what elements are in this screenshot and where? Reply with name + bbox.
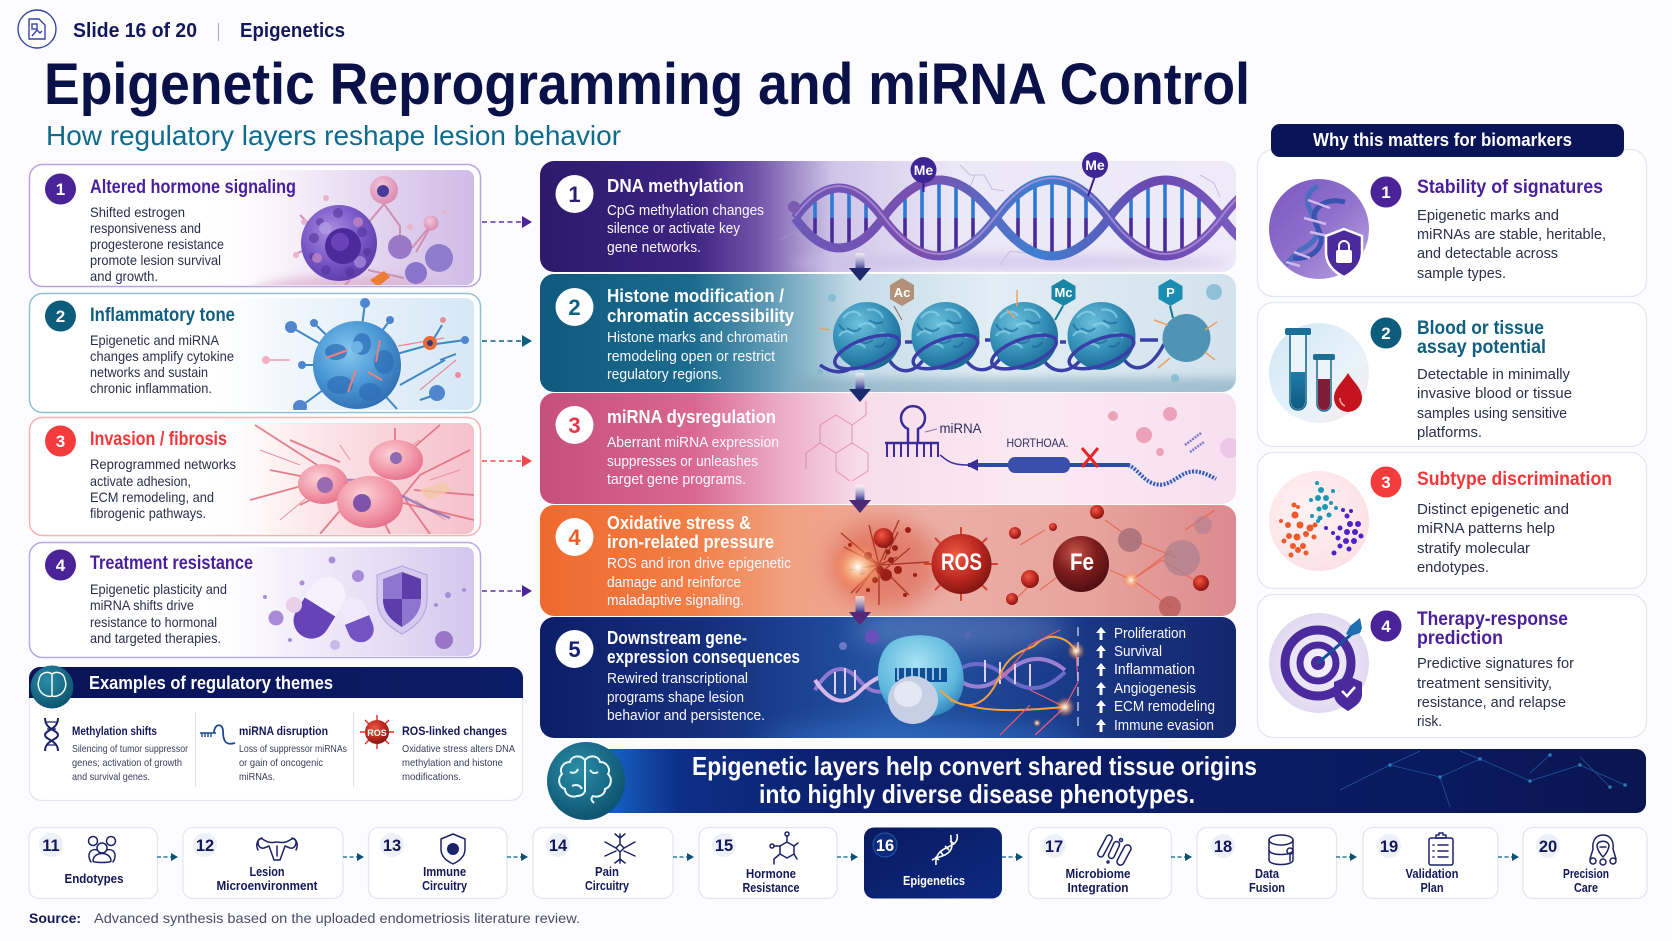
banner text <box>692 751 1257 809</box>
banner text: Epigenetic layers help convert shared tissue origins <box>692 751 1257 781</box>
number badge <box>556 288 594 326</box>
heading <box>607 627 800 667</box>
step 12: Lesion Microenvironment: 12 <box>196 837 214 855</box>
description: miRNA shifts drive <box>90 598 194 613</box>
step 17: Microbiome Integration: Microbiome <box>1066 867 1131 881</box>
description: samples using sensitive <box>1417 405 1567 422</box>
description: ROS and iron drive epigenetic <box>607 556 791 572</box>
step 14: Pain Circuitry <box>533 828 673 898</box>
heading: Blood or tissue <box>1417 317 1544 339</box>
description: responsiveness and <box>90 221 201 236</box>
header bar <box>29 667 523 698</box>
description: Aberrant miRNA expression <box>607 435 779 451</box>
step 15: Hormone Resistance <box>699 828 837 898</box>
description: chronic inflammation. <box>90 381 212 396</box>
section name: Epigenetics <box>240 20 345 42</box>
description <box>1417 207 1606 282</box>
description: Distinct epigenetic and <box>1417 501 1569 518</box>
panel heading: why this matters <box>1271 124 1624 157</box>
biomarker card 2: assay potential <box>1258 302 1646 446</box>
description: miRNAs are stable, heritable, <box>1417 226 1606 243</box>
step 16: Epigenetics (current) <box>864 828 1002 898</box>
theme: ROS-linked changes <box>360 715 515 783</box>
description: ECM remodeling, and <box>90 490 214 505</box>
description <box>1417 501 1569 576</box>
icon: target and arrow <box>1269 613 1369 713</box>
description: networks and sustain <box>90 365 208 380</box>
description: stratify molecular <box>1417 540 1530 557</box>
heading: assay potential <box>1417 336 1546 358</box>
step 13: Immune Circuitry: 13 <box>383 837 401 855</box>
illustration: DNA helix <box>780 164 1236 272</box>
description <box>90 205 224 284</box>
description: platforms. <box>1417 424 1482 441</box>
panel: altered hormone signaling <box>28 164 482 288</box>
heading <box>1417 608 1568 649</box>
layer 4: oxidative stress <box>540 505 1236 618</box>
description <box>607 556 791 609</box>
description <box>607 671 765 724</box>
number badge: 1 <box>568 182 581 207</box>
number badge: 4 <box>1381 617 1391 636</box>
target transcript <box>940 455 1216 485</box>
biomarker card 3: subtype discrimination <box>1258 452 1646 588</box>
subtitle: How regulatory layers reshape lesion behavior <box>46 120 621 151</box>
methyl tag <box>910 157 936 192</box>
list: upregulated outcomes: ECM remodeling <box>1114 699 1215 715</box>
heading: Inflammatory tone <box>90 305 235 326</box>
step 17: Microbiome Integration: Integration <box>1068 881 1128 895</box>
histone mark: P <box>1158 279 1182 318</box>
miRNA hairpin <box>885 406 939 457</box>
step 20: Precision Care: Care <box>1574 881 1598 895</box>
description: Predictive signatures for <box>1417 655 1574 672</box>
step 16: Epigenetics (current): Epigenetics <box>903 874 965 888</box>
icon: ROS burst: ROS <box>367 728 387 738</box>
step 12: Lesion Microenvironment: Lesion <box>250 865 284 879</box>
illustration: inflamed cell <box>262 298 474 410</box>
histone mark: Mc: Mc <box>1054 285 1073 300</box>
description: maladaptive signaling. <box>607 593 744 609</box>
step 13: Immune Circuitry: Circuitry <box>422 879 467 893</box>
step 16: Epigenetics (current): 16 <box>876 837 894 855</box>
description: Epigenetic plasticity and <box>90 582 227 597</box>
description <box>607 203 764 256</box>
heading <box>607 285 795 326</box>
step 17: Microbiome Integration: 17 <box>1045 838 1063 856</box>
description: treatment sensitivity, <box>1417 675 1552 692</box>
theme: methylation shifts: Silencing of tumor suppressor <box>72 743 188 755</box>
number badge <box>1370 610 1402 642</box>
illustration: miRNA hairpin and target <box>806 401 1240 485</box>
step 15: Hormone Resistance: 15 <box>715 837 733 855</box>
step 19: Validation Plan <box>1363 828 1498 898</box>
step 19: Validation Plan: Plan <box>1420 881 1444 895</box>
description: Shifted estrogen <box>90 205 185 220</box>
arrow: card 1 to layer 1 <box>482 216 532 228</box>
number badge <box>45 426 76 456</box>
description: miRNA patterns help <box>1417 520 1555 537</box>
description <box>90 457 236 521</box>
description: changes amplify cytokine <box>90 349 234 364</box>
description: damage and reinforce <box>607 575 741 591</box>
layer 1: DNA methylation <box>540 152 1236 272</box>
step 18: Data Fusion <box>1197 828 1336 898</box>
description: silence or activate key <box>607 221 741 237</box>
heading: Subtype discrimination <box>1417 468 1612 490</box>
step 13: Immune Circuitry <box>368 828 507 898</box>
panel heading: why this matters: Why this matters for biomarkers <box>1313 130 1572 150</box>
list: upregulated outcomes: Survival <box>1114 644 1162 660</box>
icon: brain badge <box>30 666 74 708</box>
step 13: Immune Circuitry: Immune <box>423 865 466 879</box>
number badge: 3 <box>568 413 581 438</box>
panel: inflammatory tone <box>30 294 480 414</box>
description: sample types. <box>1417 265 1506 282</box>
banner text: into highly diverse disease phenotypes. <box>759 779 1195 809</box>
number badge <box>556 518 594 556</box>
illustration: ROS and iron <box>830 505 1215 618</box>
title: Epigenetic Reprogramming and miRNA Control <box>44 52 1250 117</box>
description: and targeted therapies. <box>90 631 221 646</box>
description <box>90 582 227 646</box>
step 18: Data Fusion: Data <box>1255 867 1280 881</box>
heading: Therapy-response <box>1417 608 1568 630</box>
step 19: Validation Plan: 19 <box>1380 838 1398 856</box>
illustration: miRNA hairpin and target: miRNA <box>940 420 982 436</box>
number badge <box>45 300 76 332</box>
icon: brain <box>547 742 625 820</box>
number badge: 1 <box>1381 183 1391 202</box>
theme: ROS-linked changes: Oxidative stress alters DNA <box>402 743 515 755</box>
description: behavior and persistence. <box>607 708 765 724</box>
network decoration <box>1340 751 1627 807</box>
heading: miRNA dysregulation <box>607 406 776 427</box>
number badge <box>556 175 594 213</box>
layer 2: histone modification <box>540 274 1240 400</box>
heading: chromatin accessibility <box>607 305 795 326</box>
histone mark: P: P <box>1166 285 1175 300</box>
number badge: 4 <box>56 556 66 575</box>
theme: miRNA disruption: miRNAs. <box>239 771 275 783</box>
number badge: 2 <box>1381 324 1391 343</box>
number badge: 4 <box>568 525 581 550</box>
illustration: fibrotic cells <box>250 423 474 534</box>
number badge: 3 <box>1381 473 1391 492</box>
number badge: 2 <box>56 307 65 326</box>
step 12: Lesion Microenvironment: Microenvironment <box>216 879 318 893</box>
step 18: Data Fusion: Fusion <box>1249 881 1285 895</box>
description: Histone marks and chromatin <box>607 330 788 346</box>
description <box>607 435 779 488</box>
heading: prediction <box>1417 627 1503 649</box>
theme: ROS-linked changes: modifications. <box>402 771 461 783</box>
heading <box>607 512 774 552</box>
theme: methylation shifts: genes; activation of growth <box>72 757 182 769</box>
source line: Source: <box>29 910 81 926</box>
number badge: 3 <box>56 432 65 451</box>
theme: miRNA disruption: miRNA disruption <box>239 726 328 738</box>
heading: Altered hormone signaling <box>90 177 296 198</box>
icon: DNA with shield <box>1269 179 1369 279</box>
theme: methylation shifts: and survival genes. <box>72 771 150 783</box>
illustration: miRNA hairpin and target: HORTHOAA. <box>1006 436 1068 450</box>
layer 3: miRNA dysregulation <box>540 393 1240 504</box>
heading: DNA methylation <box>607 175 744 196</box>
step 14: Pain Circuitry: Circuitry <box>585 879 629 893</box>
step 20: Precision Care <box>1523 828 1647 898</box>
list: upregulated outcomes <box>1096 626 1215 734</box>
description <box>1417 655 1574 730</box>
theme: methylation shifts: Methylation shifts <box>72 726 157 738</box>
panel: examples of regulatory themes <box>29 666 523 800</box>
icon: DNA <box>45 718 58 751</box>
number badge <box>556 406 594 444</box>
header bar: Examples of regulatory themes <box>89 672 333 693</box>
description: invasive blood or tissue <box>1417 385 1572 402</box>
histone mark: Mc <box>1052 279 1076 320</box>
panel: treatment resistance <box>30 542 480 658</box>
biomarker card 4: therapy response <box>1258 594 1646 738</box>
description: risk. <box>1417 713 1442 730</box>
illustration: capsules and shield <box>262 547 474 656</box>
description: resistance, and relapse <box>1417 694 1566 711</box>
icon: ROS burst <box>360 715 394 749</box>
histone mark: Ac: Ac <box>894 285 910 300</box>
illustration: ROS and iron: Fe <box>1070 549 1094 576</box>
step 11: Endotypes <box>29 828 158 898</box>
description: endotypes. <box>1417 559 1489 576</box>
illustration: ROS and iron: ROS <box>941 549 982 576</box>
methyl tag: Me <box>1085 157 1105 173</box>
heading: Treatment resistance <box>90 553 253 574</box>
description <box>90 333 234 396</box>
theme: miRNA disruption: Loss of suppressor miRNAs <box>239 743 347 755</box>
icon: tubes and blood drop <box>1269 323 1369 423</box>
step 18: Data Fusion: 18 <box>1214 838 1232 856</box>
description: and detectable across <box>1417 245 1558 262</box>
theme: miRNA disruption <box>200 725 347 783</box>
heading: Stability of signatures <box>1417 176 1603 198</box>
heading: Downstream gene- <box>607 627 747 648</box>
connector arrows between steps <box>157 853 1519 861</box>
list: upregulated outcomes: Inflammation <box>1114 662 1195 678</box>
navigation strip <box>29 828 1647 898</box>
step 19: Validation Plan: Validation <box>1406 867 1458 881</box>
step 15: Hormone Resistance: Resistance <box>742 881 800 895</box>
heading <box>1417 317 1546 358</box>
histone mark: Ac <box>890 278 914 320</box>
description: Reprogrammed networks <box>90 457 236 472</box>
biomarker card 1: stability <box>1258 150 1646 296</box>
description: remodeling open or restrict <box>607 349 775 365</box>
number badge <box>45 550 76 580</box>
arrow: card 4 to layer 4 <box>482 585 532 597</box>
panel: invasion / fibrosis <box>30 418 480 536</box>
heading: Oxidative stress & <box>607 512 751 533</box>
takeaway banner <box>547 742 1646 820</box>
theme: methylation shifts <box>45 718 188 783</box>
layer 5: downstream consequences <box>540 617 1236 738</box>
arrow: layer 1 to 2 <box>849 253 871 281</box>
theme: miRNA disruption: or gain of oncogenic <box>239 757 323 769</box>
heading: iron-related pressure <box>607 531 774 552</box>
list: upregulated outcomes: Immune evasion <box>1114 718 1214 734</box>
number badge: 1 <box>56 180 65 199</box>
illustration: transcription complex <box>764 617 1084 738</box>
icon: miRNA hairpin <box>200 725 235 744</box>
arrow: layer 3 to 4 <box>849 485 871 513</box>
description: gene networks. <box>607 240 701 256</box>
source line: Advanced synthesis based on the uploaded endometriosis literature review. <box>94 910 580 926</box>
icon: slide badge <box>18 10 56 48</box>
description: promote lesion survival <box>90 253 221 268</box>
heading: Histone modification / <box>607 285 784 306</box>
arrow: card 3 to layer 3 <box>482 455 532 467</box>
description: Rewired transcriptional <box>607 671 748 687</box>
slide header <box>18 10 345 48</box>
description: programs shape lesion <box>607 690 744 706</box>
description: fibrogenic pathways. <box>90 506 206 521</box>
theme: ROS-linked changes: ROS-linked changes <box>402 726 507 738</box>
illustration: hormone cell <box>249 170 474 285</box>
description: Epigenetic marks and <box>1417 207 1559 224</box>
description: suppresses or unleashes <box>607 454 758 470</box>
number badge <box>1370 176 1402 208</box>
number badge <box>1370 466 1402 498</box>
inhibition cross <box>1082 448 1098 467</box>
step 17: Microbiome Integration <box>1028 828 1172 898</box>
description: target gene programs. <box>607 472 746 488</box>
arrow: layer 4 to 5 <box>849 596 871 625</box>
step 12: Lesion Microenvironment <box>183 828 343 898</box>
step 11: Endotypes: 11 <box>42 837 60 855</box>
step 20: Precision Care: Precision <box>1563 867 1609 881</box>
number badge: 2 <box>568 295 581 320</box>
step 11: Endotypes: Endotypes <box>64 872 124 886</box>
heading: expression consequences <box>607 646 800 667</box>
step 14: Pain Circuitry: Pain <box>595 865 619 879</box>
description: regulatory regions. <box>607 367 722 383</box>
description: Epigenetic and miRNA <box>90 333 220 348</box>
number badge: 5 <box>568 637 581 662</box>
description <box>1417 366 1572 441</box>
illustration: nucleosomes with marks <box>790 278 1240 400</box>
list: upregulated outcomes: Angiogenesis <box>1114 681 1196 697</box>
step 15: Hormone Resistance: Hormone <box>746 867 796 881</box>
description: and growth. <box>90 269 158 284</box>
step 20: Precision Care: 20 <box>1539 838 1557 856</box>
description: activate adhesion, <box>90 474 191 489</box>
number badge <box>556 630 594 668</box>
number badge <box>1370 318 1402 348</box>
list: upregulated outcomes: Proliferation <box>1114 626 1186 642</box>
theme: ROS-linked changes: methylation and histone <box>402 757 503 769</box>
arrow: card 2 to layer 2 <box>482 335 532 347</box>
description: Detectable in minimally <box>1417 366 1570 383</box>
description: progesterone resistance <box>90 237 224 252</box>
number badge <box>45 174 76 204</box>
arrow: layer 2 to 3 <box>849 373 871 402</box>
step 14: Pain Circuitry: 14 <box>549 837 568 855</box>
slide number: Slide 16 of 20 <box>73 20 197 42</box>
methyl tag <box>1082 152 1108 196</box>
description <box>607 330 788 383</box>
heading: Invasion / fibrosis <box>90 429 227 450</box>
icon: clustered dots <box>1269 471 1369 571</box>
methyl tag: Me <box>914 162 933 178</box>
description: resistance to hormonal <box>90 615 217 630</box>
description: CpG methylation changes <box>607 203 764 219</box>
